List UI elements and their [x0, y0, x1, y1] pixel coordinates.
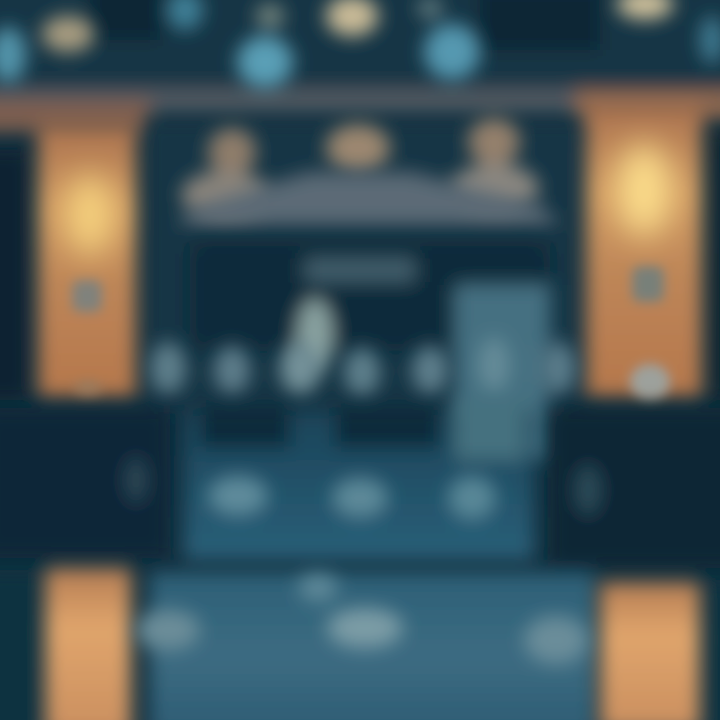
ceiling band — [0, 0, 720, 132]
left pillar — [38, 125, 136, 397]
pillar glows — [66, 144, 672, 255]
dark upper panel — [190, 240, 550, 460]
balcony figures — [181, 118, 539, 219]
side panel marks — [124, 456, 602, 516]
pillar sconces — [72, 266, 670, 400]
balcony ledge — [175, 172, 560, 225]
floor — [0, 570, 720, 720]
central lower block — [184, 400, 534, 560]
lower pillar reflections — [45, 568, 700, 720]
upper wall — [0, 120, 720, 410]
right pillar — [586, 105, 702, 397]
ceiling lights — [0, 0, 720, 88]
lower seat highlights — [208, 476, 496, 520]
floor reflections — [136, 574, 588, 664]
lower side panels — [0, 408, 720, 568]
row of pale seats — [150, 337, 576, 396]
